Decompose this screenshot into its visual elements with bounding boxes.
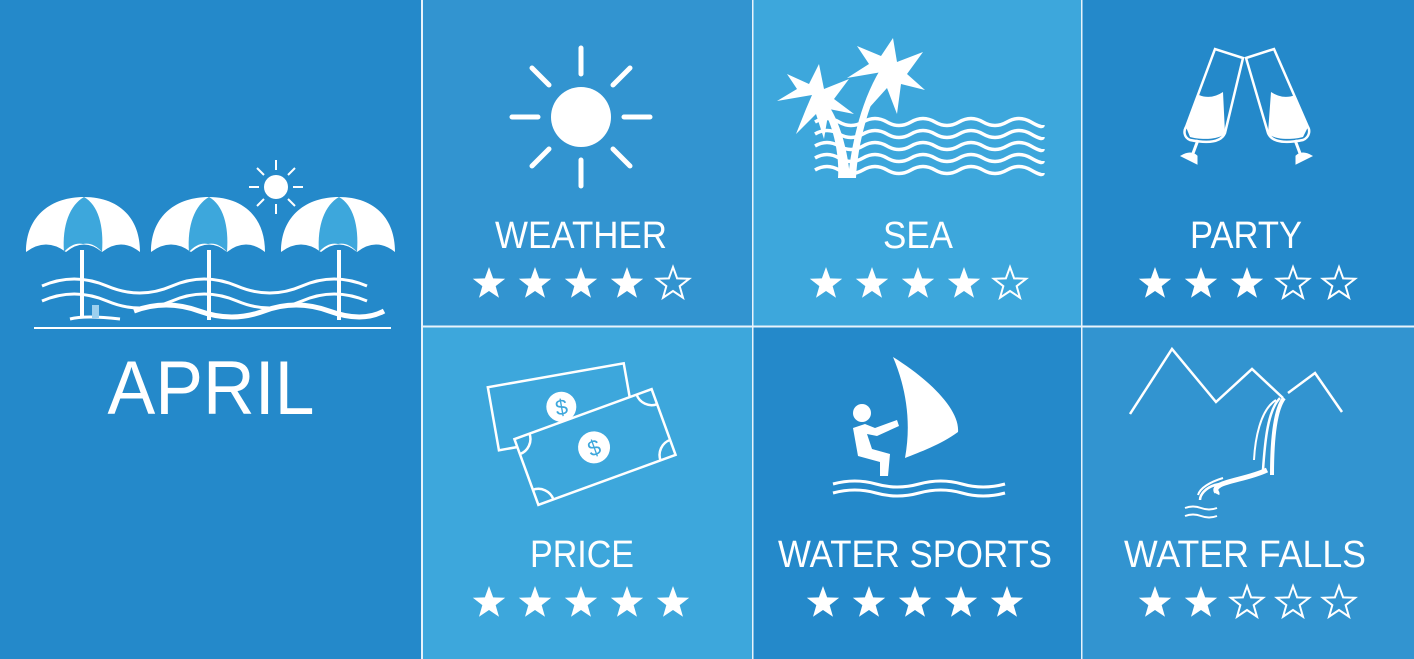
panel: weather <box>423 0 752 326</box>
icon: banknotes: $ <box>584 434 604 462</box>
icon: banknotes: $ <box>553 394 570 421</box>
heading: PRICE <box>530 534 634 576</box>
icon: sun <box>512 48 650 186</box>
panel: april <box>0 0 422 659</box>
heading: WATER FALLS <box>1124 534 1366 576</box>
icon: beach umbrellas <box>26 160 395 329</box>
panel: sea <box>753 0 1081 326</box>
rating: 2 of 5 <box>1139 586 1355 617</box>
rating: 4 of 5 <box>810 267 1026 298</box>
icon: palms and sea <box>777 38 1043 178</box>
heading: PARTY <box>1190 215 1302 257</box>
heading: WATER SPORTS <box>778 534 1052 576</box>
icon: champagne glasses <box>1181 49 1312 164</box>
rating: 5 of 5 <box>807 586 1023 617</box>
panel: water sports <box>753 327 1081 659</box>
heading: SEA <box>883 215 954 257</box>
icon: banknotes <box>488 363 676 505</box>
rating: 4 of 5 <box>473 267 689 298</box>
rating: 5 of 5 <box>473 586 689 617</box>
title: april: APRIL <box>108 346 314 431</box>
panel: water falls <box>1082 327 1414 659</box>
icon: mountains and waterfall <box>1130 349 1342 518</box>
icon: windsurfer <box>833 357 1005 496</box>
rating: 3 of 5 <box>1139 267 1355 298</box>
heading: WEATHER <box>495 215 667 257</box>
panel: price <box>423 327 752 659</box>
panel: party <box>1082 0 1414 326</box>
